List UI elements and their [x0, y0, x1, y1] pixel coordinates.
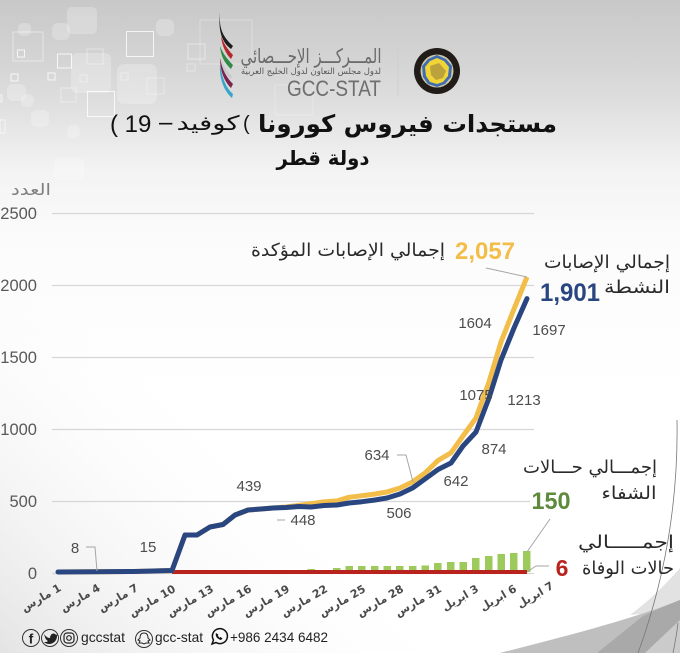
data labels: 15 — [140, 539, 156, 556]
data labels: 1604 — [458, 315, 492, 332]
x axis date labels: 13 مارس — [165, 582, 216, 620]
icon: twitter — [42, 630, 58, 646]
title: covid word: كوفيد — [176, 111, 240, 135]
data labels: 8 — [71, 540, 79, 557]
x axis date labels: 3 ابريل — [440, 582, 481, 614]
x axis date labels: 16 مارس — [203, 582, 254, 620]
title: bold part: مستجدات فيروس كورونا — [258, 110, 557, 138]
icon: coloured ribbons — [219, 12, 233, 98]
total confirmed line — [58, 277, 527, 572]
value: 1,901: 1,901 — [540, 279, 600, 307]
data labels: 448 — [290, 512, 316, 529]
x axis date labels: 1 مارس — [19, 581, 64, 615]
caption: total confirmed: إجمالي الإصابات المؤكدة — [251, 240, 445, 261]
data labels: 439 — [236, 478, 262, 495]
x axis date labels: 19 مارس — [241, 582, 292, 620]
data labels: 642 — [443, 473, 469, 490]
data labels: 1213 — [507, 392, 541, 409]
subtitle: country: دولة قطر — [276, 146, 370, 170]
handle: gcc-stat: gcc-stat — [155, 629, 203, 645]
x axis date labels: 10 مارس — [127, 582, 178, 620]
data labels: 874 — [481, 441, 507, 458]
x axis date labels: 22 مارس — [279, 582, 330, 620]
y axis labels: 2500 — [0, 205, 37, 223]
data labels: 506 — [386, 505, 412, 522]
x axis date labels — [19, 579, 556, 620]
icon: GCC seal — [414, 48, 460, 94]
logo text: subtitle: لدول مجلس التعاون لدول الخليج العربية — [241, 67, 381, 77]
caption: recovered line 2: الشفاء — [602, 483, 656, 504]
deaths line — [172, 570, 527, 574]
callout: total confirmed — [251, 238, 515, 265]
caption: deaths line 2: حالات الوفاة — [582, 558, 674, 579]
data labels: 634 — [364, 447, 390, 464]
logo: GCC-STAT — [219, 12, 460, 101]
icon: instagram — [60, 630, 78, 646]
callout: deaths — [556, 532, 674, 581]
x axis date labels: 25 مارس — [317, 582, 368, 620]
caption: recovered line 1: إجمـــالي حـــالات — [523, 457, 657, 478]
callout: recovered — [523, 457, 657, 515]
y axis labels: 500 — [9, 493, 37, 511]
caption: active line 1: إجمالي الإصابات — [544, 252, 670, 273]
y axis labels: 1000 — [0, 421, 37, 439]
title: number: ( 19 — [110, 111, 151, 138]
title: bracket: ( — [243, 113, 250, 135]
recovered bars — [308, 551, 530, 572]
value: 150: 150 — [532, 488, 570, 515]
x axis date labels: 6 ابريل — [478, 582, 519, 614]
x axis date labels: 31 مارس — [393, 582, 444, 620]
footer: social media — [22, 629, 328, 648]
y axis title: العدد — [11, 180, 51, 199]
active cases line — [58, 299, 527, 572]
title — [110, 109, 557, 138]
y axis labels: 1500 — [0, 349, 37, 367]
callout: active cases — [540, 252, 670, 307]
y axis labels — [0, 205, 37, 583]
data labels: 1075 — [459, 387, 493, 404]
caption: active line 2: النشطة — [604, 277, 670, 298]
y axis labels: 0 — [28, 565, 37, 583]
x axis date labels: 4 مارس — [58, 581, 103, 615]
x axis date labels: 28 مارس — [355, 582, 406, 620]
phone number: +986 2434 6482 — [230, 629, 328, 645]
logo text: arabic name: المـــركـــز الإحـــصائي — [240, 44, 382, 69]
caption: deaths line 1: إجمـــــالي — [578, 532, 674, 553]
icon: snapchat — [136, 630, 152, 648]
data labels: 1697 — [532, 322, 566, 339]
y axis labels: 2000 — [0, 277, 37, 295]
data labels — [71, 315, 566, 557]
handle: gccstat: gccstat — [81, 629, 125, 645]
value: 6: 6 — [556, 555, 568, 581]
x axis date labels: 7 ابريل — [515, 579, 556, 611]
icon: facebook: f — [29, 630, 34, 646]
x axis date labels: 7 مارس — [96, 581, 141, 615]
logo text: GCC-STAT: GCC-STAT — [287, 76, 381, 101]
value: 2,057: 2,057 — [455, 238, 515, 265]
icon: whatsapp — [212, 629, 227, 644]
icon: facebook — [22, 630, 40, 646]
line chart — [0, 180, 566, 620]
leader lines — [86, 268, 550, 572]
title: dash: – — [159, 109, 173, 136]
